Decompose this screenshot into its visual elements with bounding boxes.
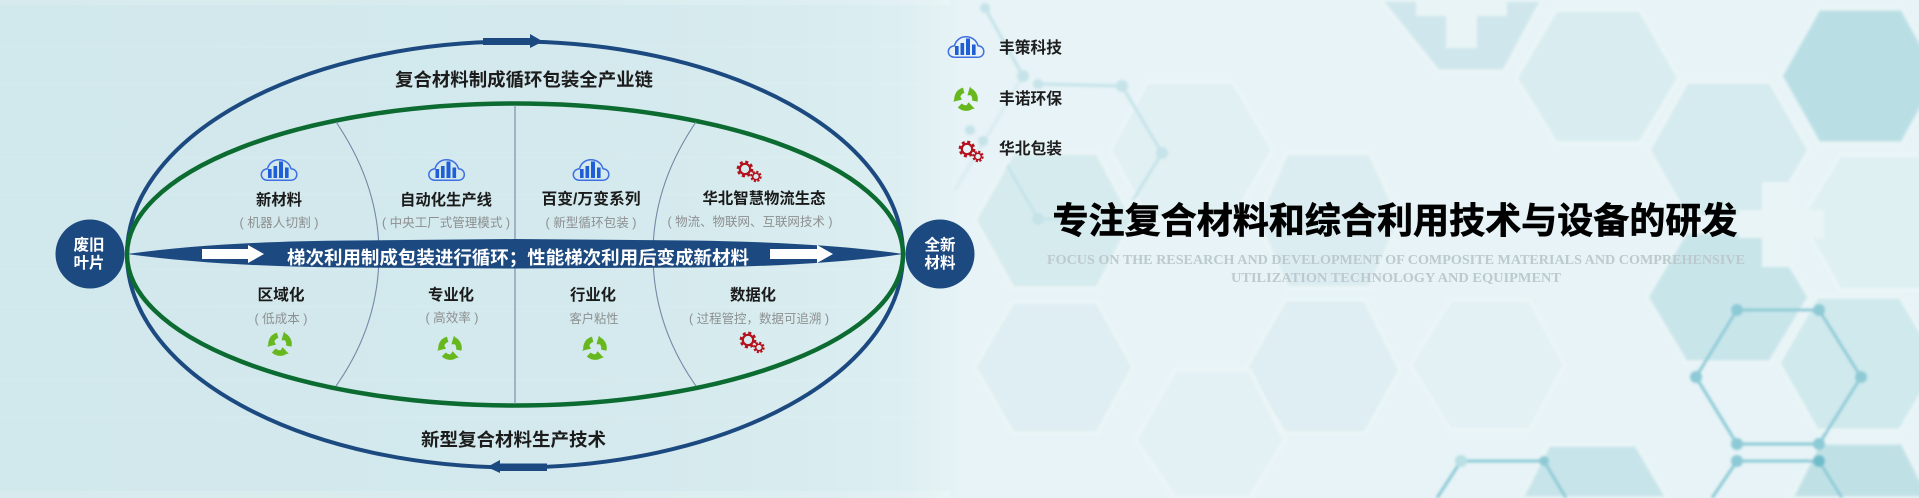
cross near heading	[1739, 182, 1824, 267]
heading: 华北智慧物流生态	[702, 188, 826, 208]
top direction arrow	[483, 34, 543, 48]
node: waste blades: 叶片	[73, 254, 105, 272]
node: waste blades: 废旧	[73, 235, 105, 254]
legend	[948, 37, 1062, 161]
subtext: ( 机器人切割 )	[240, 215, 318, 230]
heading: 专业化	[428, 285, 474, 304]
central arrow band	[127, 239, 903, 268]
icon: gears	[741, 333, 764, 352]
subtext: ( 物流、物联网、互联网技术 )	[668, 215, 832, 229]
legend item: environment: 丰诺环保	[999, 89, 1062, 108]
heading: 区域化	[258, 285, 305, 304]
white arrow left	[202, 245, 264, 263]
subtext: 客户粘性	[570, 311, 618, 326]
bottom technology title: 新型复合材料生产技术	[421, 429, 606, 450]
heading: 行业化	[570, 285, 616, 304]
icon: recycle	[264, 332, 292, 358]
heading: 新材料	[256, 190, 302, 209]
inner green ellipse	[127, 104, 903, 406]
cross	[1416, 0, 1507, 48]
icon: cloud chart	[261, 160, 297, 180]
section divider lines	[336, 105, 696, 404]
diagram: circular economy ellipses	[56, 34, 974, 473]
left panel background	[0, 0, 960, 498]
icon: gears	[738, 162, 761, 181]
column 1 lower	[254, 285, 308, 358]
heading: 数据化	[730, 285, 776, 304]
molecule lines: lower right	[1437, 310, 1861, 498]
subtext: ( 新型循环包装 )	[546, 215, 636, 230]
column 1 upper	[240, 160, 318, 230]
icon: cloud chart	[573, 160, 609, 180]
bottom direction arrow	[487, 460, 547, 473]
white arrow right	[770, 245, 833, 263]
column 3 upper	[542, 160, 640, 230]
english subtitle: FOCUS ON THE RESEARCH AND DEVELOPMENT OF COMPOSITE MATERIALS AND COMPREHENSIVE	[1047, 253, 1745, 268]
node: new material: 全新	[924, 235, 956, 254]
icon: cloud chart	[429, 160, 464, 180]
subtext: ( 过程管控，数据可追溯 )	[689, 311, 829, 326]
heading: 百变/万变系列	[542, 189, 640, 208]
subtext: ( 低成本 )	[254, 312, 308, 326]
node: new material	[906, 220, 974, 288]
main heading: 专注复合材料和综合利用技术与设备的研发	[1052, 200, 1738, 241]
legend item: packaging: 华北包装	[999, 139, 1062, 158]
column 4 upper	[668, 162, 832, 229]
english subtitle: UTILIZATION TECHNOLOGY AND EQUIPMENT	[1231, 271, 1562, 286]
subtext: ( 中央工厂式管理模式 )	[382, 215, 510, 230]
molecule lines: upper left	[955, 8, 1162, 219]
column 4 lower	[689, 285, 829, 352]
node: waste blades	[56, 220, 124, 288]
english subtitle	[1047, 253, 1745, 286]
band text: 梯次利用制成包装进行循环；性能梯次利用后变成新材料	[287, 247, 749, 268]
icon: recycle	[434, 336, 462, 362]
icon: recycle	[579, 336, 607, 362]
node: new material: 材料	[924, 253, 956, 272]
column 3 lower	[570, 285, 618, 362]
column 2 upper	[382, 160, 510, 230]
outer blue ellipse	[127, 42, 903, 468]
subtext: ( 高效率 )	[426, 310, 478, 325]
heading: 自动化生产线	[400, 190, 492, 209]
legend item: technology: 丰策科技	[999, 38, 1062, 57]
column 2 lower	[426, 285, 478, 362]
top chain title: 复合材料制成循环包装全产业链	[395, 69, 654, 90]
